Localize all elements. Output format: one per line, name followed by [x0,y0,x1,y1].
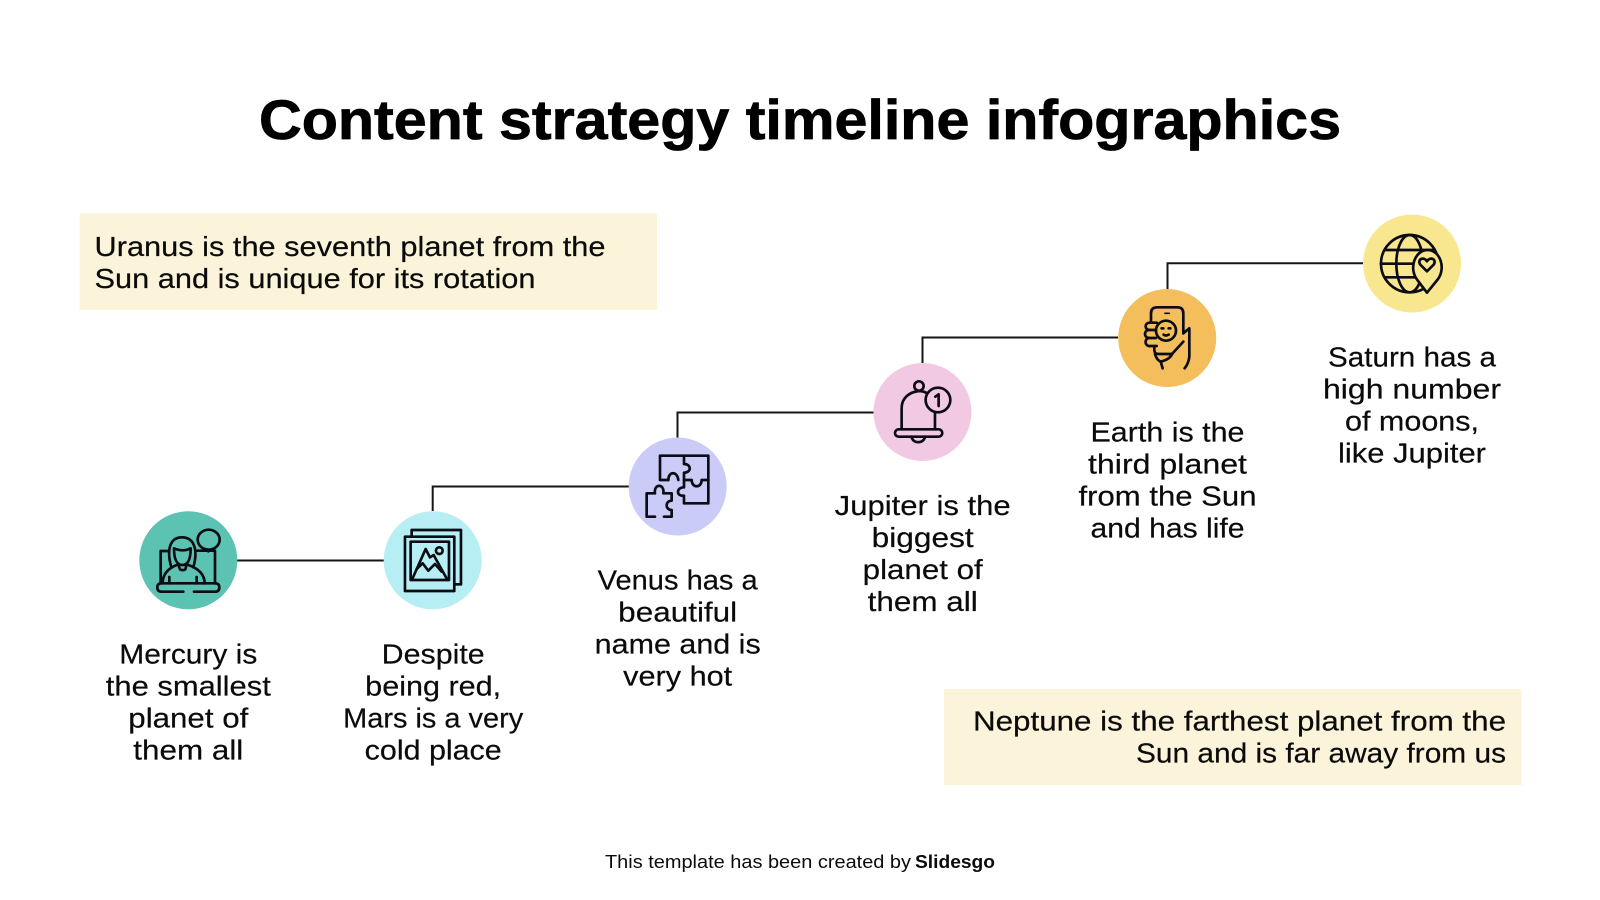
timeline connectors [237,263,1363,560]
step 4: Jupiter [835,363,1011,617]
step 1: Mercury [106,511,271,766]
label: Earth: Earth is the [1090,416,1244,448]
label: Mars [343,638,523,766]
label: Mercury: them all [133,734,243,766]
label: Saturn [1323,342,1501,468]
label: Jupiter: biggest [872,522,974,553]
icon: photo frames [405,530,461,591]
step 6: Saturn [1323,214,1501,468]
node circle: teal [139,511,237,609]
callout: Neptune: Neptune is the farthest planet from the [973,706,1506,736]
icon: notification bell [895,381,950,442]
label: Jupiter: Jupiter is the [835,490,1011,521]
callout: Uranus [80,214,657,310]
callout: Neptune [944,689,1522,785]
footer credit: This template has been created by [605,852,911,872]
label: Venus: name and is [595,628,761,660]
label: Saturn: of moons, [1345,406,1479,436]
label: Mars: cold place [365,734,502,766]
title: Content strategy timeline infographics [259,88,1341,151]
label: Mars: Mars is a very [343,702,523,734]
label: Venus: beautiful [618,596,737,628]
label: Venus: Venus has a [598,564,758,596]
label: Earth [1078,416,1256,544]
footer credit: Slidesgo [915,852,995,872]
node circle: light blue [384,511,482,609]
label: Venus: very hot [623,660,732,692]
label: Earth: third planet [1088,448,1247,480]
icon: person at laptop [157,530,220,592]
label: Saturn: high number [1323,374,1501,404]
label: Earth: and has life [1090,512,1244,544]
label: Venus [595,564,761,692]
icon: hand holding phone [1145,307,1189,368]
step 2: Mars [343,511,523,766]
step 3: Venus [595,438,761,692]
callout: Uranus: Sun and is unique for its rotation [94,263,536,294]
icon: globe with heart pin [1381,235,1442,293]
icon: puzzle pieces [647,456,708,517]
label: Jupiter: planet of [863,554,983,585]
label: Mars: Despite [382,638,485,670]
step 5: Earth [1078,289,1256,544]
label: Mercury: the smallest [106,670,271,702]
label: Mercury: planet of [128,702,249,734]
node circle: yellow [1363,214,1461,312]
callout: Uranus: Uranus is the seventh planet from the [94,231,606,262]
node circle: orange [1118,289,1216,387]
label: Mercury [106,638,271,766]
node circle: lavender [629,438,727,536]
label: Jupiter [835,490,1011,617]
label: Mercury: Mercury is [119,638,257,670]
label: Jupiter: them all [868,586,978,617]
node circle: pink [874,363,972,461]
label: Saturn: Saturn has a [1328,342,1496,372]
label: Mars: being red, [365,670,501,702]
callout: Neptune: Sun and is far away from us [1136,738,1506,768]
label: Earth: from the Sun [1078,480,1256,512]
label: Saturn: like Jupiter [1338,438,1486,468]
